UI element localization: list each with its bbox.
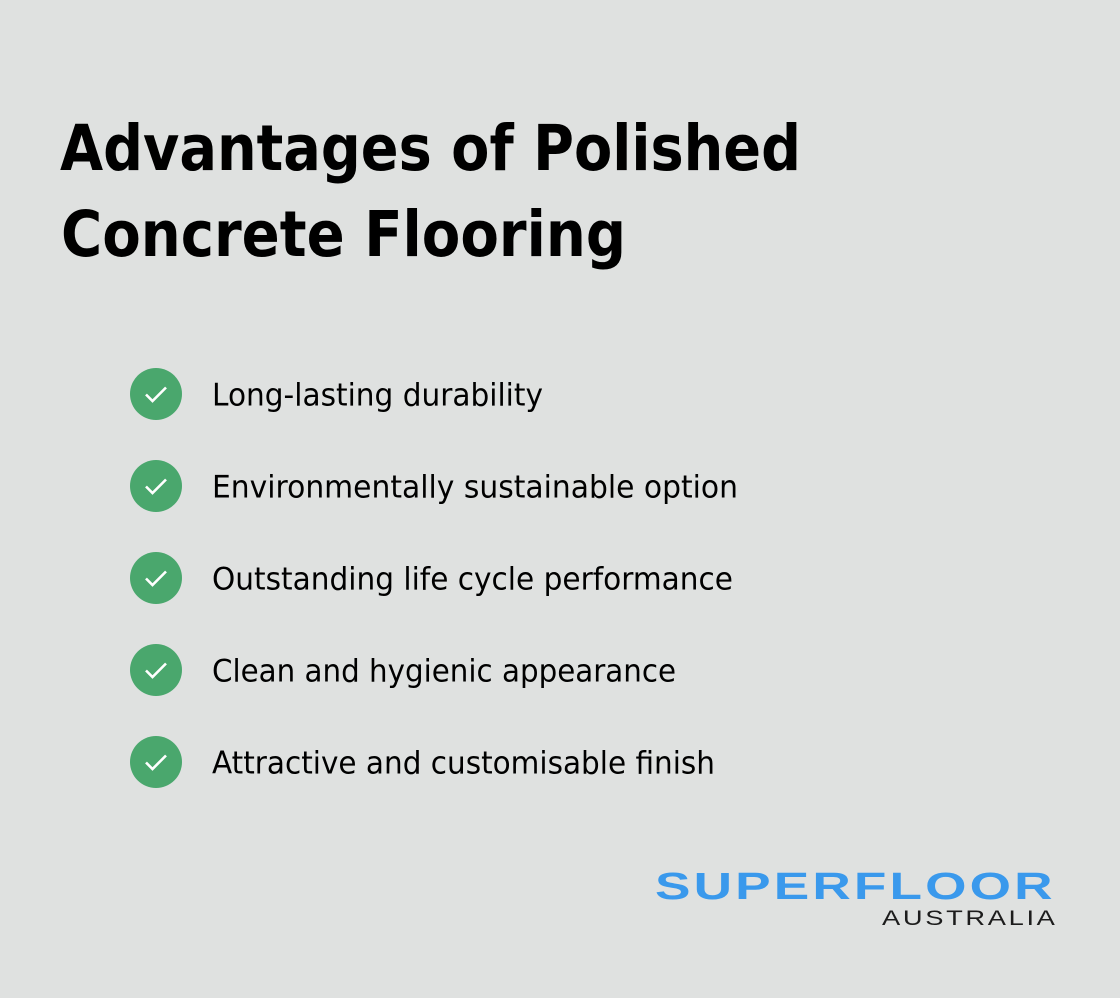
item: environmentally sustainable option: Environmentally sustainable option [212,470,738,506]
item: environmentally sustainable option [130,460,738,512]
item: outstanding life cycle performance [130,552,733,604]
item: attractive and customisable finish [130,736,715,788]
logo: Superfloor Australia [655,864,1056,930]
title: Advantages of Polished [60,112,801,185]
item: attractive and customisable finish: Attractive and customisable finish [212,746,715,782]
item: long-lasting durability [130,368,543,420]
title [60,112,801,271]
title: Concrete Flooring [61,198,626,271]
item: outstanding life cycle performance: Outstanding life cycle performance [212,562,733,598]
item: clean and hygienic appearance [130,644,676,696]
item: clean and hygienic appearance: Clean and hygienic appearance [212,654,676,690]
item: long-lasting durability: Long-lasting durability [212,378,543,414]
checklist [130,368,738,788]
logo: Superfloor Australia: SUPERFLOOR [655,864,1053,907]
logo: Superfloor Australia: AUSTRALIA [882,907,1056,930]
